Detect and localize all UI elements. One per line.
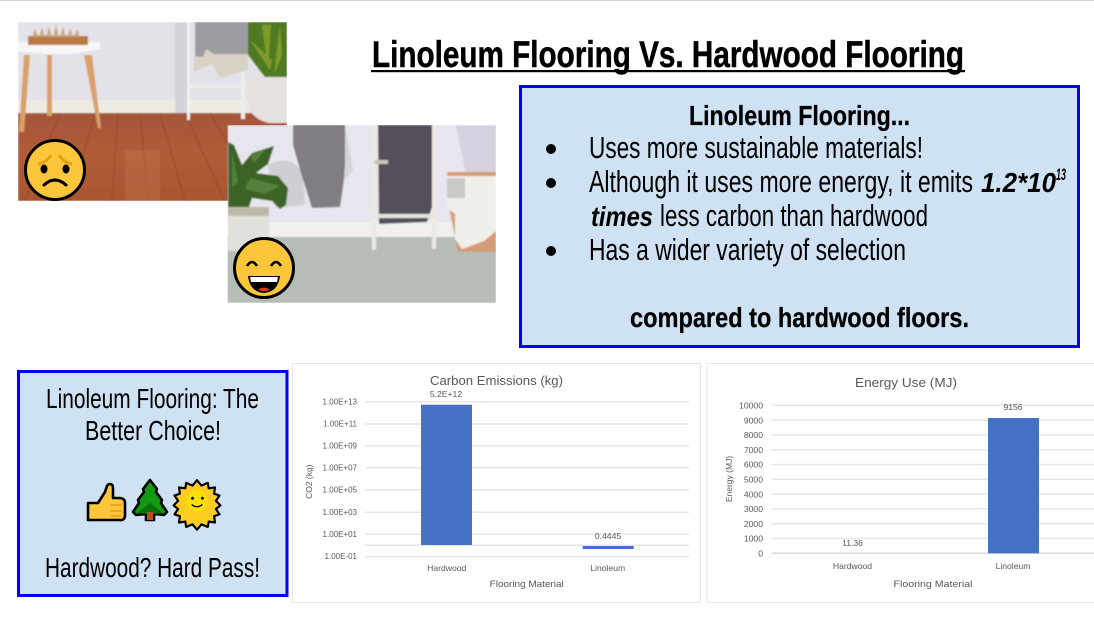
panel: linoleum flooring benefits <box>520 86 1078 346</box>
bar: linoleum <box>988 418 1039 553</box>
category labels <box>833 561 1030 571</box>
bullet: carbon comparison <box>546 164 1066 233</box>
conclusion heading: Better Choice! <box>85 415 221 446</box>
y axis labels: 7000 <box>744 445 763 455</box>
y axis labels: 3000 <box>744 504 763 514</box>
bullet: variety of selection: Has a wider variety of selection <box>589 232 906 267</box>
panel: conclusion <box>18 372 287 596</box>
x axis title: Flooring Material <box>490 579 564 590</box>
bullet: carbon comparison: 13 <box>1056 165 1066 184</box>
category labels: Hardwood <box>833 561 872 571</box>
bar: hardwood <box>421 405 472 545</box>
data label: hardwood: 5.2E+12 <box>430 389 462 399</box>
y axis labels: 0 <box>758 548 763 558</box>
panel heading: Linoleum Flooring... <box>689 100 910 131</box>
conclusion heading: Linoleum Flooring: The <box>46 383 259 414</box>
y axis labels: 1.00E+09 <box>323 442 358 450</box>
y axis labels: 5000 <box>744 474 763 484</box>
bullet: carbon comparison: times <box>591 201 653 232</box>
data label: linoleum: 9156 <box>1003 402 1023 412</box>
bullet: carbon comparison: 1.2*10 <box>981 167 1056 198</box>
category labels <box>427 563 625 573</box>
bullet: sustainable materials: Uses more sustainable materials! <box>589 130 923 165</box>
y axis labels: 10000 <box>739 400 763 410</box>
y axis labels: 9000 <box>744 415 763 425</box>
bullet: carbon comparison: Although it uses more energy, it emits <box>589 164 973 199</box>
y axis title: Energy (MJ) <box>724 456 734 502</box>
y axis labels: 1.00E-01 <box>325 552 358 561</box>
bar chart: energy use <box>707 364 1094 602</box>
icon: worried face emoji <box>26 140 84 200</box>
icon: grinning face emoji <box>234 238 294 298</box>
y axis labels <box>739 400 763 558</box>
y axis labels: 1.00E+03 <box>323 508 358 517</box>
y axis labels: 8000 <box>744 430 763 440</box>
category labels: Linoleum <box>996 561 1030 571</box>
bar chart: carbon emissions <box>292 364 700 602</box>
chart title: Carbon Emissions (kg) <box>430 373 563 388</box>
category labels: Hardwood <box>427 563 467 573</box>
icon: sun with face <box>174 480 220 530</box>
closing line: Hardwood? Hard Pass! <box>45 552 260 583</box>
y axis labels: 4000 <box>744 489 763 499</box>
y axis labels: 1.00E+11 <box>323 420 358 428</box>
bullet: variety of selection <box>546 232 906 267</box>
icon: evergreen tree <box>133 480 167 520</box>
y axis labels: 1.00E+05 <box>323 486 358 494</box>
data label: linoleum: 0.4445 <box>595 531 621 541</box>
y axis labels: 1.00E+01 <box>323 530 358 539</box>
panel closing line: compared to hardwood floors. <box>630 302 969 333</box>
y axis labels: 1.00E+13 <box>323 398 358 406</box>
category labels: Linoleum <box>590 563 625 573</box>
y axis labels: 6000 <box>744 460 763 470</box>
y axis labels: 1.00E+07 <box>323 464 358 472</box>
y axis labels: 1000 <box>744 534 763 544</box>
bar: linoleum <box>583 546 634 549</box>
y axis labels <box>323 398 358 561</box>
y axis title: CO2 (kg) <box>304 464 314 499</box>
chart title: Energy Use (MJ) <box>855 375 957 390</box>
y axis labels: 2000 <box>744 519 763 529</box>
icon: thumbs up <box>88 484 125 520</box>
photo: linoleum floor room <box>228 125 496 303</box>
bullet: sustainable materials <box>546 130 923 165</box>
title: Linoleum Flooring Vs. Hardwood Flooring <box>372 34 964 75</box>
data label: hardwood: 11.36 <box>842 538 863 548</box>
conclusion heading <box>46 383 259 446</box>
bullet: carbon comparison: less carbon than hardwood <box>660 198 928 233</box>
x axis title: Flooring Material <box>894 579 972 590</box>
photo: hardwood floor room <box>18 22 287 201</box>
